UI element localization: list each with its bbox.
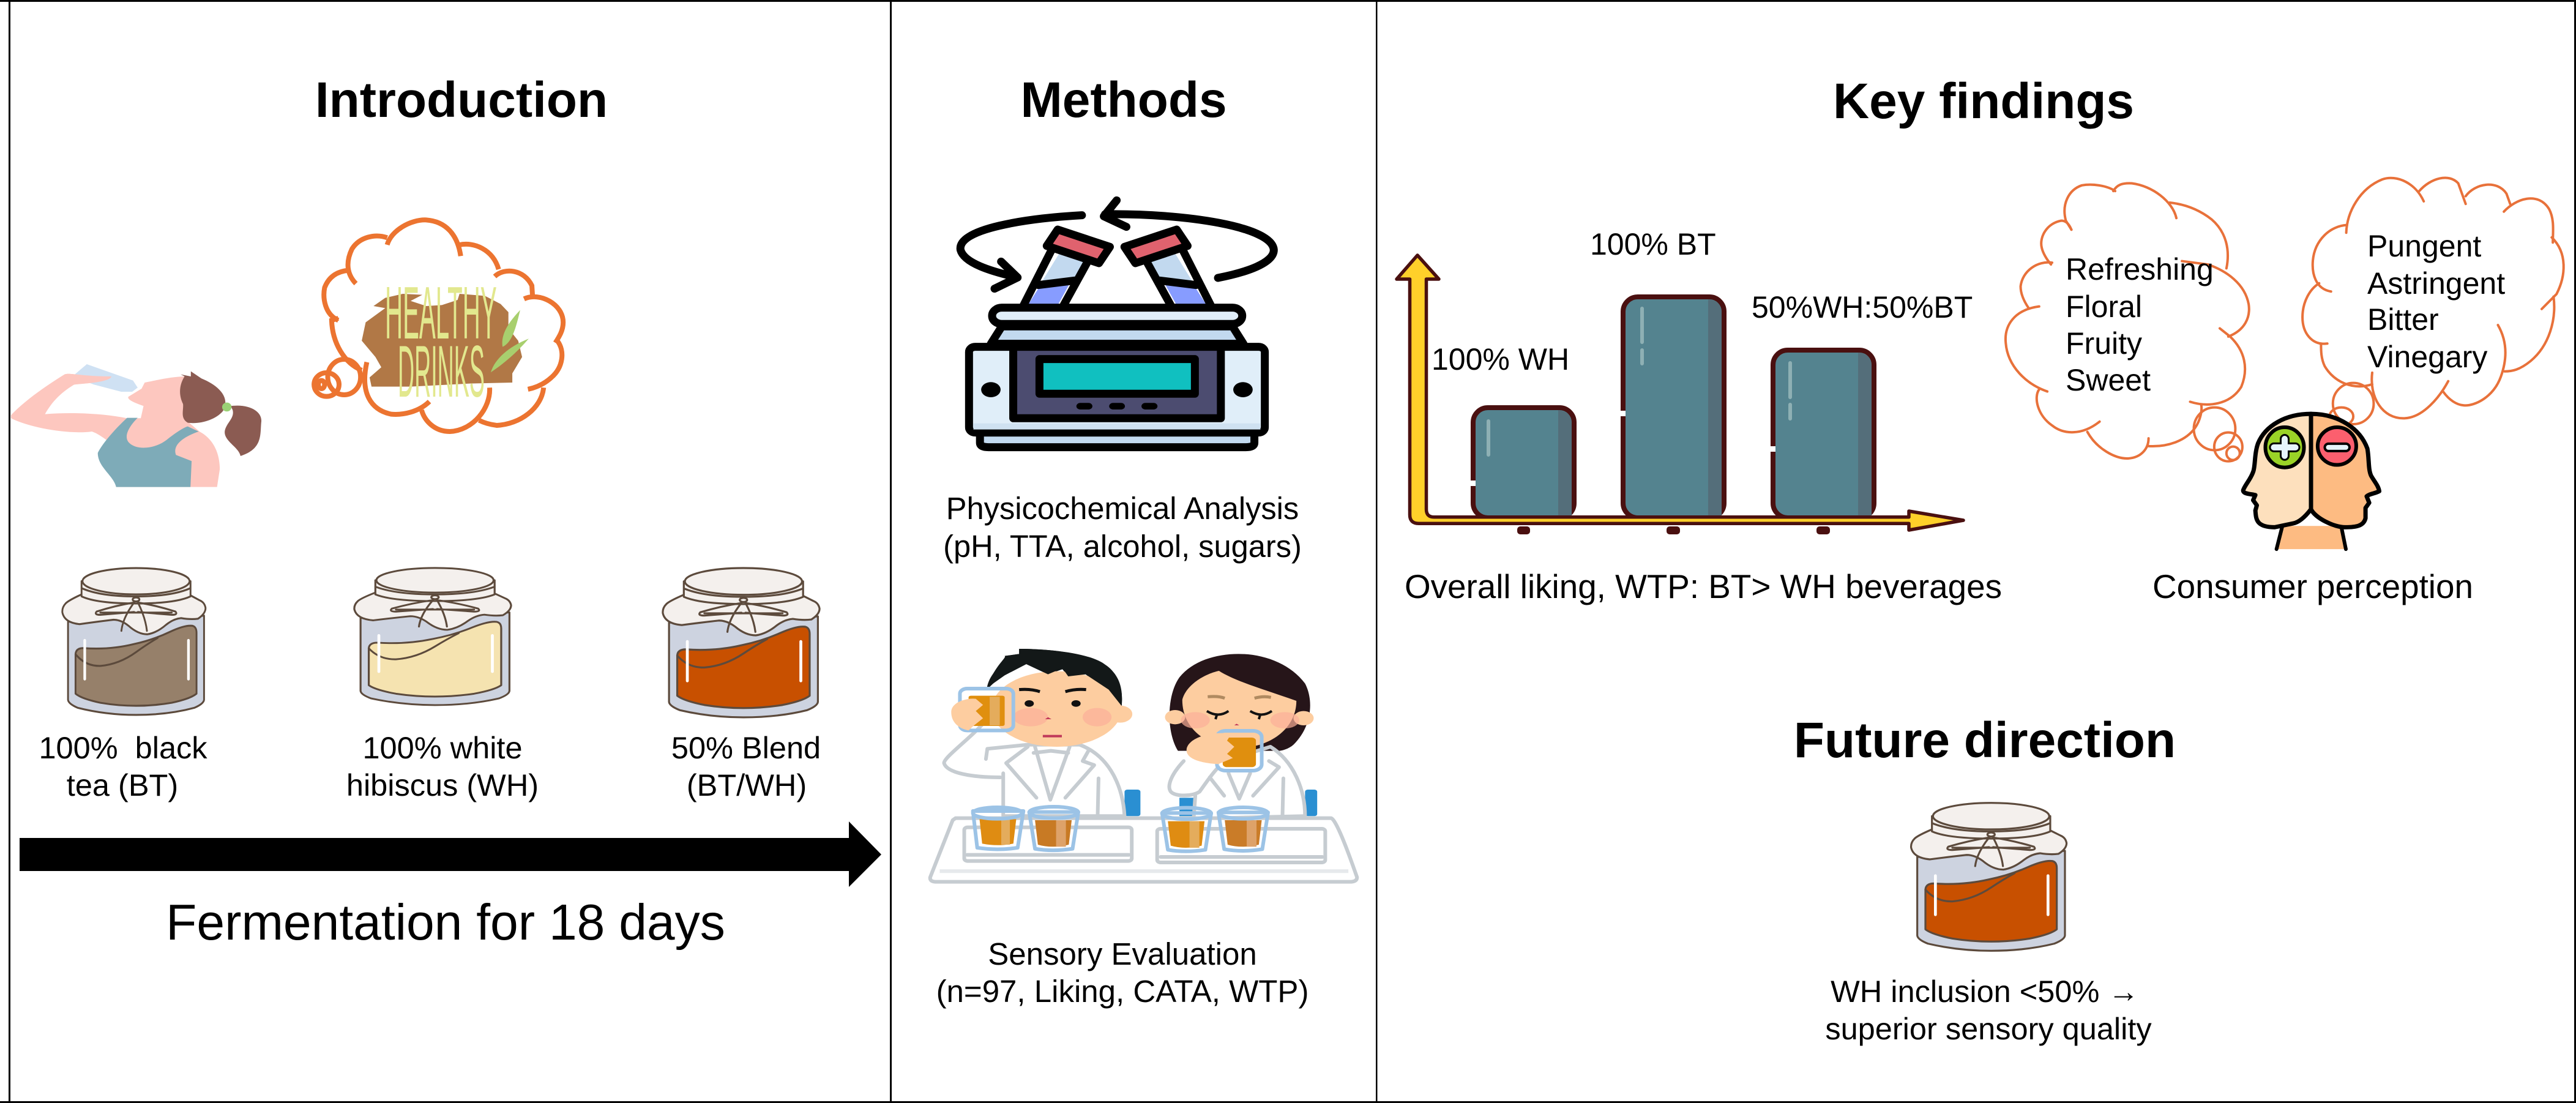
text: positive attributes: Floral — [2066, 290, 2142, 324]
text: positive attributes: Fruity — [2066, 326, 2142, 361]
text: sensory evaluation: (n=97, Liking, CATA, WTP) — [936, 974, 1309, 1009]
text: black tea label: tea (BT) — [67, 768, 178, 802]
icon: sensory panelists — [930, 649, 1357, 882]
text: sensory evaluation: Sensory Evaluation — [988, 937, 1257, 971]
chart: bar chart of liking — [1397, 227, 1973, 534]
label: DRINKS: DRINKS — [398, 331, 485, 413]
label: 100% BT: 100% BT — [1590, 227, 1716, 261]
text: physicochemical analysis — [943, 491, 1302, 564]
label: 50%WH:50%BT: 50%WH:50%BT — [1752, 290, 1973, 324]
text: blend label — [671, 730, 821, 802]
icon: jar of blend — [663, 568, 819, 717]
bar: 100% BT — [1619, 297, 1724, 518]
text: sensory evaluation — [936, 937, 1309, 1009]
arrow: fermentation timeline — [20, 821, 881, 887]
icon: jar of low hibiscus blend — [1911, 803, 2067, 951]
text: negative attributes: Bitter — [2367, 302, 2439, 337]
text: positive attributes: Sweet — [2066, 363, 2151, 397]
heading: Introduction: Introduction — [315, 72, 608, 128]
text: white hibiscus label: 100% white — [362, 730, 523, 765]
text: black tea label: 100% black — [39, 730, 207, 765]
bar: 100% WH — [1469, 408, 1574, 518]
icon: jar of black tea — [62, 568, 206, 715]
text: negative attributes: Vinegary — [2367, 340, 2487, 374]
panel: introduction — [11, 72, 881, 951]
text: positive attributes: Refreshing — [2066, 252, 2214, 286]
heading: Key findings: Key findings — [1833, 73, 2134, 129]
text: future direction note: superior sensory quality — [1825, 1011, 2152, 1046]
text: negative attributes — [2367, 229, 2505, 374]
text: black tea label — [39, 730, 207, 802]
icon: centrifuge — [960, 200, 1274, 447]
icon: jar of white hibiscus — [354, 568, 511, 705]
heading: Methods: Methods — [1020, 72, 1227, 128]
icon: thought cloud with healthy drinks — [314, 220, 563, 432]
text: blend label: (BT/WH) — [687, 768, 807, 802]
text: future direction note: WH inclusion <50% → — [1831, 974, 2139, 1009]
text: negative attributes: Astringent — [2367, 266, 2505, 301]
text: physicochemical analysis: Physicochemical Analysis — [946, 491, 1299, 526]
label: HEALTHY: HEALTHY — [385, 272, 497, 355]
text: physicochemical analysis: (pH, TTA, alcohol, sugars) — [943, 529, 1302, 564]
panel: methods — [930, 72, 1357, 1009]
icon: two-faced head with plus and minus — [2243, 414, 2380, 549]
text: fermentation duration: Fermentation for 18 days — [166, 895, 725, 951]
text: white hibiscus label — [346, 730, 539, 802]
label: 100% WH: 100% WH — [1432, 342, 1569, 376]
text: white hibiscus label: hibiscus (WH) — [346, 768, 539, 802]
axes — [1397, 255, 1963, 530]
text: negative attributes: Pungent — [2367, 229, 2481, 263]
text: overall liking summary: Overall liking, WTP: BT> WH beverages — [1405, 567, 2002, 605]
panel: key findings — [1397, 73, 2564, 605]
icon: thought clouds — [2006, 178, 2564, 462]
bar: 50%WH:50%BT — [1769, 350, 1874, 518]
heading: Future direction: Future direction — [1794, 712, 2176, 768]
text: positive attributes — [2066, 252, 2214, 397]
text: blend label: 50% Blend — [671, 730, 821, 765]
panel: future direction — [1794, 712, 2176, 1046]
text: consumer perception: Consumer perception — [2152, 567, 2473, 605]
icon: woman drinking from bottle — [11, 364, 261, 487]
text: future direction note — [1825, 974, 2152, 1046]
